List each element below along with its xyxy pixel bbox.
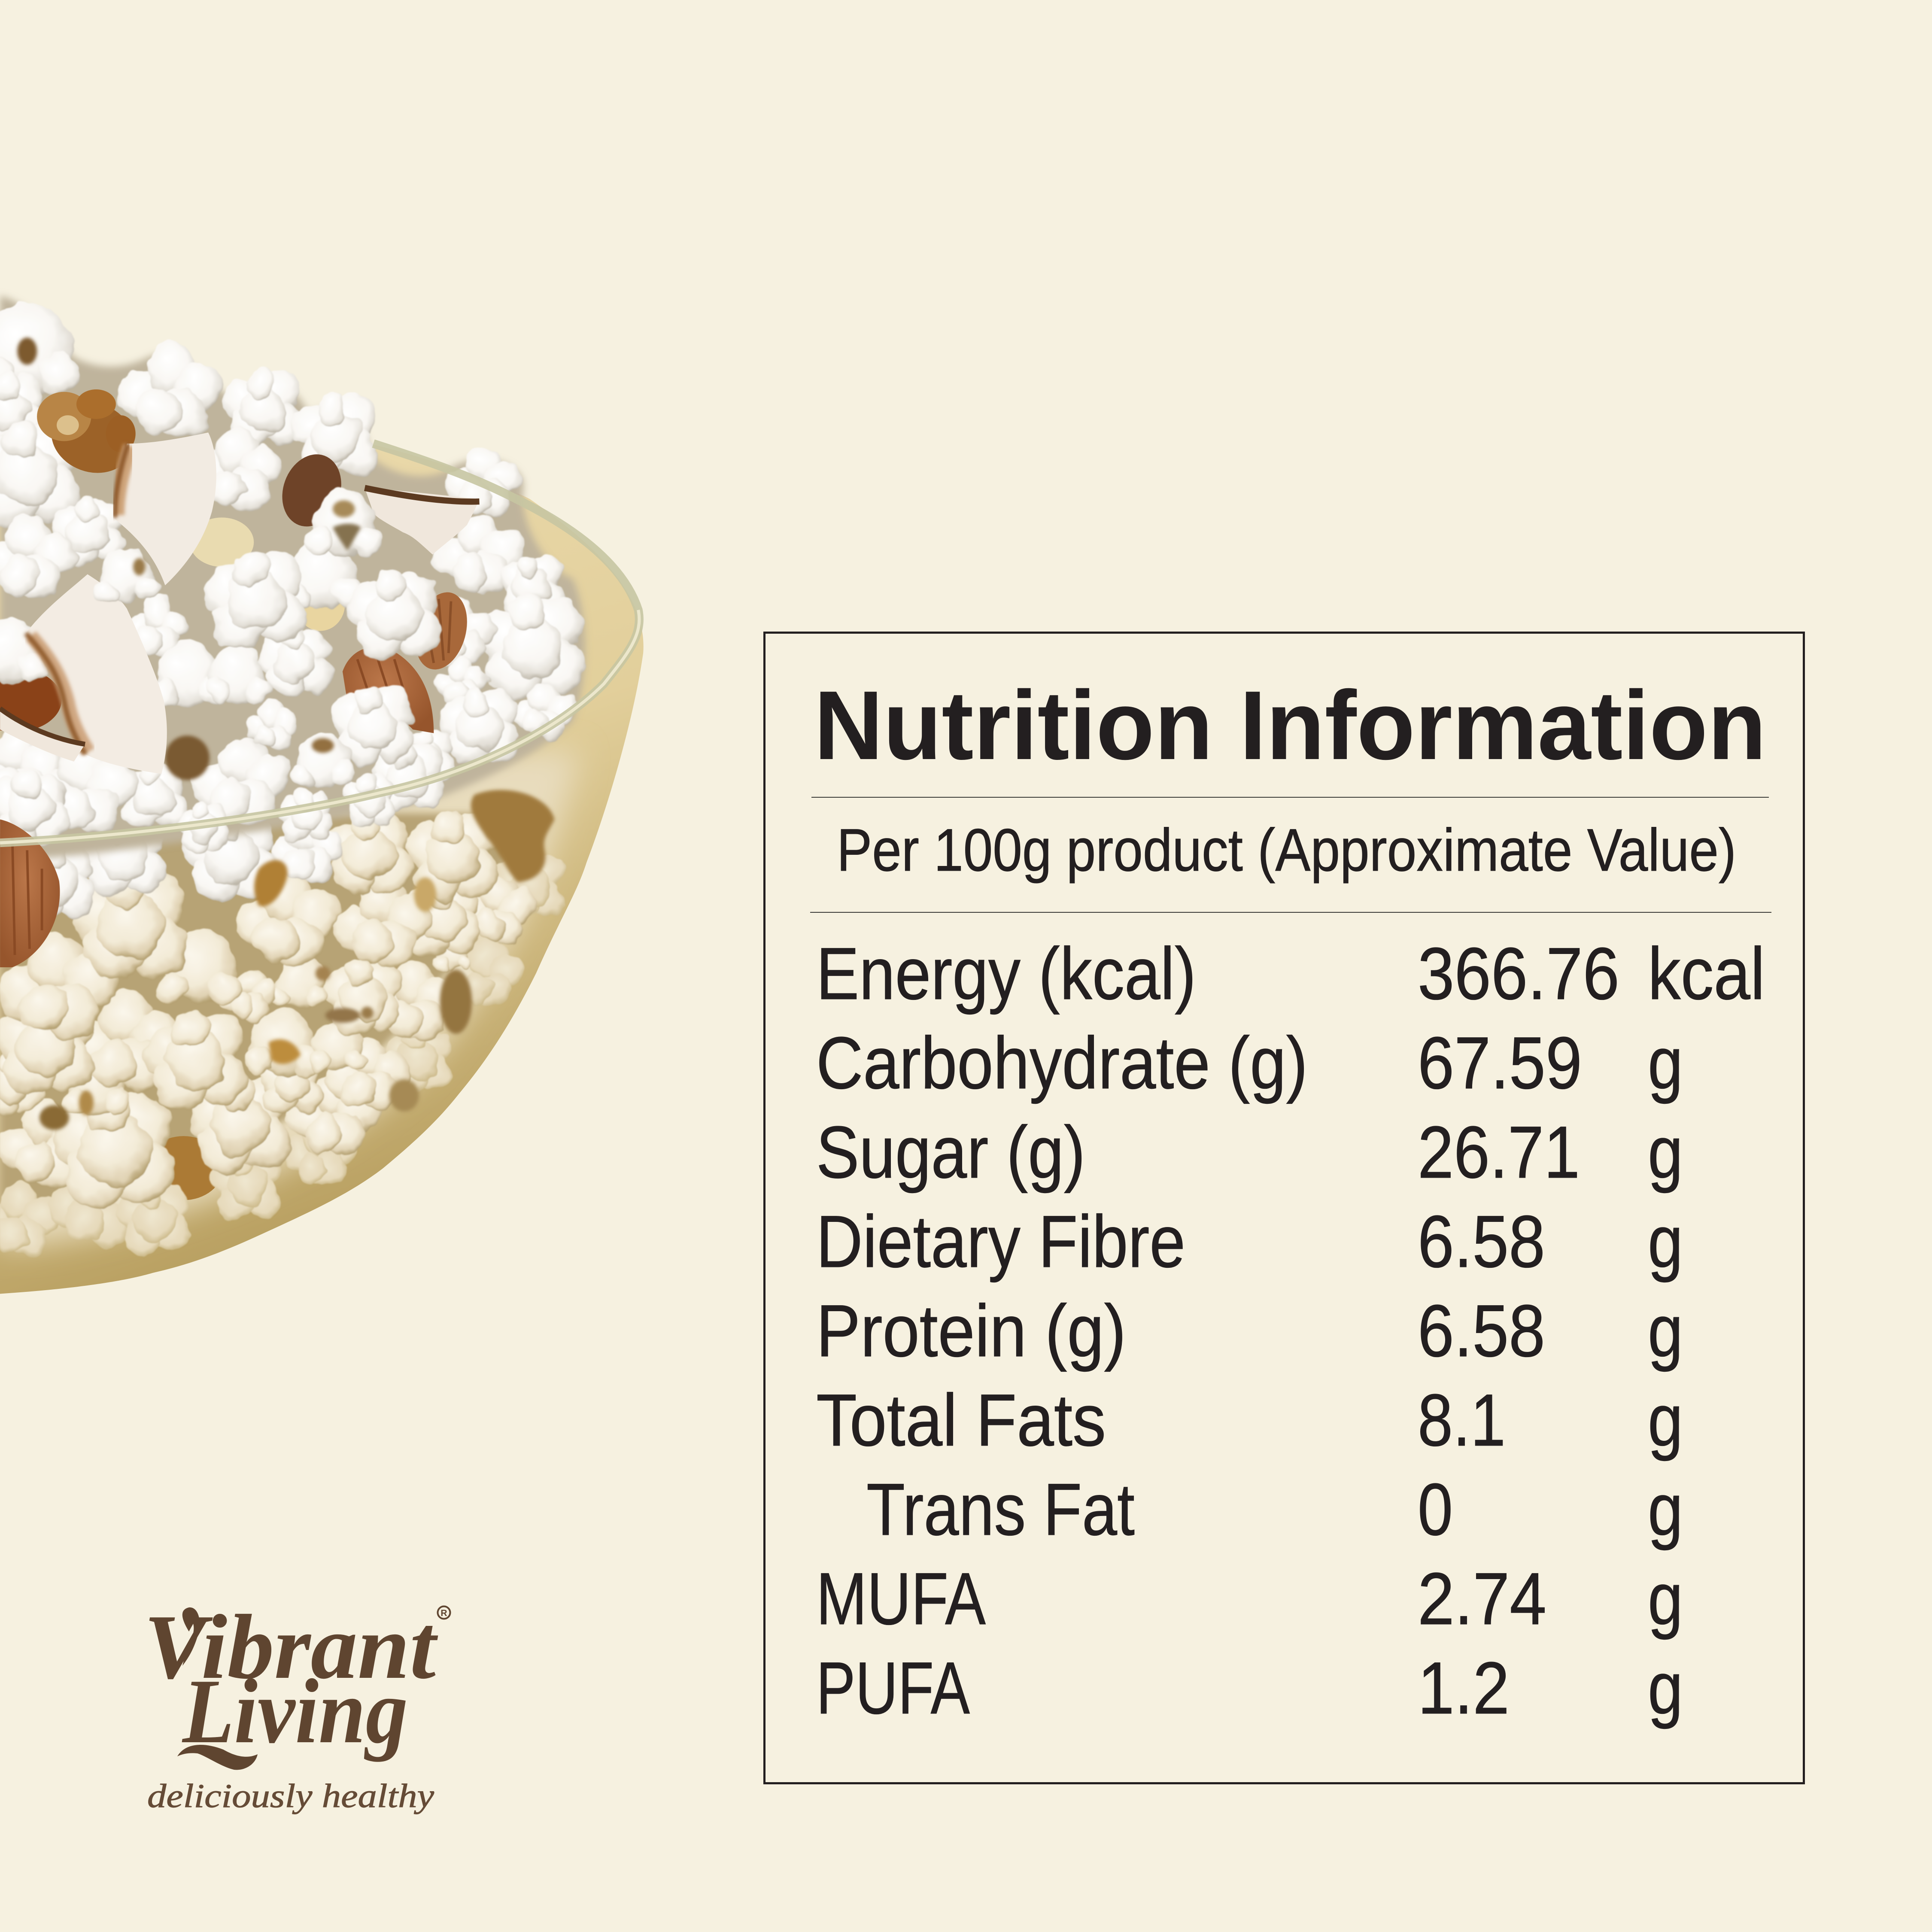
bowl of popcorn and nuts	[0, 296, 644, 1294]
row: carbohydrate: g	[1648, 1022, 1683, 1104]
row: trans fat: 0	[1418, 1468, 1453, 1551]
row: dietary fibre: Dietary Fibre	[816, 1200, 1185, 1283]
row: total fats: Total Fats	[816, 1379, 1106, 1461]
row: PUFA: g	[1648, 1647, 1683, 1729]
almond, centre	[343, 647, 434, 733]
row: total fats: g	[1648, 1379, 1683, 1461]
row: protein: 6.58	[1418, 1290, 1545, 1372]
row: MUFA: 2.74	[1418, 1558, 1546, 1640]
coconut slices	[0, 432, 479, 774]
row: MUFA: g	[1648, 1558, 1683, 1640]
row: protein: Protein (g)	[816, 1290, 1126, 1372]
row: protein: g	[1648, 1290, 1683, 1372]
slim coconut	[365, 488, 479, 555]
nutrition information panel	[764, 633, 1804, 1783]
lower coconut	[26, 574, 167, 774]
infographic canvas	[0, 293, 1805, 1814]
logo tagline: deliciously healthy	[147, 1777, 434, 1814]
nutrition rows	[816, 933, 1765, 1729]
row: MUFA	[816, 1558, 1683, 1640]
walnut	[37, 389, 143, 484]
row: energy: kcal	[1648, 933, 1765, 1015]
row: sugar	[816, 1111, 1683, 1194]
glass rim	[0, 444, 639, 843]
panel frame	[764, 633, 1804, 1783]
row: energy: 366.76	[1418, 933, 1619, 1015]
nuts: walnut, almonds	[0, 389, 475, 967]
glass bowl body	[0, 370, 644, 1294]
registered mark: R	[440, 1608, 447, 1618]
logo wordmark: Vibrant: Vibrant	[144, 1595, 438, 1698]
row: PUFA	[816, 1647, 1683, 1729]
brown nuts and kernels behind the glass	[39, 790, 555, 1130]
popcorn heap above the rim	[0, 296, 586, 863]
upper coconut	[115, 432, 216, 585]
row: carbohydrate	[816, 1022, 1683, 1104]
almond, bottom left	[0, 820, 60, 967]
row: energy: Energy (kcal)	[816, 933, 1196, 1015]
logo swash: tail of the L	[177, 1745, 258, 1770]
logo wordmark: Living: Living	[182, 1660, 408, 1762]
row: energy	[816, 933, 1765, 1015]
row: MUFA: MUFA	[816, 1558, 986, 1640]
logo swash: heart curl on the V	[182, 1607, 200, 1666]
row: trans fat	[866, 1468, 1683, 1551]
coconut sliver	[0, 708, 85, 762]
row: trans fat: Trans Fat	[866, 1468, 1135, 1551]
row: sugar: g	[1648, 1111, 1683, 1194]
row: dietary fibre: g	[1648, 1200, 1683, 1283]
serving size note: Per 100g product (Approximate Value)	[837, 816, 1736, 884]
popcorn pieces over the nuts	[17, 337, 440, 788]
row: total fats	[816, 1379, 1683, 1461]
row: sugar: Sugar (g)	[816, 1111, 1085, 1194]
almond, side	[407, 586, 475, 675]
row: PUFA: 1.2	[1418, 1647, 1510, 1729]
popcorn seen through the glass	[0, 752, 579, 1256]
panel heading: Nutrition Information	[814, 671, 1766, 780]
row: PUFA: PUFA	[816, 1647, 970, 1729]
row: dietary fibre	[816, 1200, 1683, 1283]
row: total fats: 8.1	[1418, 1379, 1506, 1461]
row: protein	[816, 1290, 1683, 1372]
brand logo	[144, 1595, 450, 1814]
row: dietary fibre: 6.58	[1418, 1200, 1545, 1283]
row: carbohydrate: Carbohydrate (g)	[816, 1022, 1308, 1104]
row: trans fat: g	[1648, 1468, 1683, 1551]
registered mark	[438, 1607, 450, 1619]
row: sugar: 26.71	[1418, 1111, 1580, 1194]
row: carbohydrate: 67.59	[1418, 1022, 1582, 1104]
